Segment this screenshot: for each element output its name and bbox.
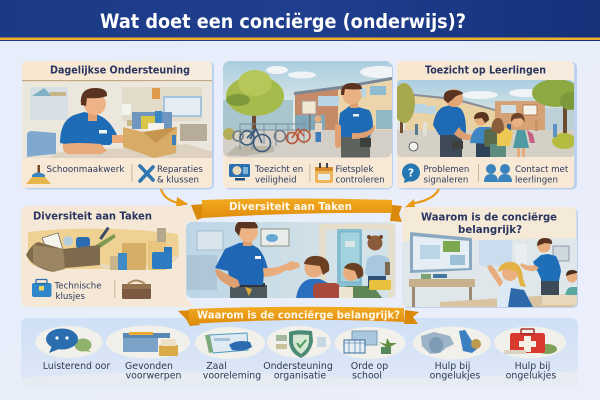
heading: Diversiteit aan Taken: Diversiteit aan Taken [33, 210, 152, 222]
icon: lost and found boxes [123, 332, 178, 356]
smart board [410, 232, 472, 273]
panel: bottom row [21, 318, 578, 386]
item: Hulp bij ongelukjes (first-aid kit) [494, 326, 566, 382]
icon: question bubble: ? [408, 166, 414, 180]
label [203, 361, 261, 382]
arrow: right panel to ribbon [409, 189, 439, 204]
panel: central illustration [186, 220, 396, 299]
tree [226, 70, 284, 130]
item: Orde op school [334, 327, 406, 382]
label: school [352, 370, 382, 382]
header banner [0, 0, 600, 41]
label: Ondersteuning [263, 361, 333, 372]
ribbon text: Diversiteit aan Taken [229, 201, 352, 213]
ribbon text: Waarom is de conciërge belangrijk? [197, 310, 400, 322]
heading: Waarom is de conciërge belangrijk?: Waarom is de conciërge [421, 212, 557, 224]
item: Zaal vooreleming [195, 327, 265, 382]
desk [409, 274, 578, 307]
label: Fietsplek controleren: controleren [336, 176, 385, 186]
child in the yard [314, 116, 322, 142]
fence [240, 124, 306, 150]
icon: speech bubbles [46, 328, 92, 353]
item: Luisterend oor [36, 326, 110, 372]
bear figure [365, 235, 390, 288]
icon: broom [26, 165, 51, 184]
label: Reparaties & klussen: Reparaties [157, 165, 203, 175]
label: Technische klusjes: klusjes [56, 292, 85, 302]
label: Problemen signaleren [424, 165, 469, 186]
label: Gevonden [125, 361, 173, 372]
person: caretaker from behind [433, 89, 474, 158]
label: Reparaties & klussen [157, 165, 203, 186]
football [409, 142, 418, 151]
label [263, 361, 333, 382]
tree left [397, 83, 415, 133]
item: Hulp bij ongelukjes (torch and bottle) [413, 326, 491, 382]
item: Ondersteuning organisatie [263, 326, 333, 382]
label: Fietsplek controleren: Fietsplek [336, 165, 373, 175]
label: Toezicht en veiligheid: Toezicht en [254, 165, 303, 175]
distant children [415, 120, 557, 137]
label: Schoonmaakwerk: Schoonmaakwerk [46, 165, 125, 175]
label: Reparaties & klussen: & klussen [157, 176, 199, 186]
yellow case [369, 280, 391, 290]
label: Problemen signaleren: signaleren [424, 176, 468, 186]
icon: calendar [315, 163, 333, 183]
label: ongelukjes [506, 370, 556, 382]
illustration: caretaker with pupils [393, 79, 580, 158]
girl raising hand [487, 262, 533, 307]
illustration: bike shed and caretaker [223, 61, 400, 158]
panel: Dagelijkse Ondersteuning [22, 61, 214, 190]
heading: Dagelijkse Ondersteuning: Dagelijkse Ondersteuning [50, 64, 190, 76]
person: caretaker writing [60, 88, 124, 154]
panel: Toezicht op Leerlingen [393, 61, 580, 190]
heading: Waarom is de conciërge belangrijk?: belangrijk? [458, 224, 522, 236]
item: Gevonden voorwerpen [106, 326, 190, 382]
ribbon: Waarom is de conciërge belangrijk? [178, 307, 419, 326]
person: teacher [520, 238, 561, 295]
illustration: conciërge at desk with box [22, 81, 212, 158]
icon: shield on screen [276, 330, 326, 358]
label [506, 361, 556, 382]
icon: first aid kit [504, 329, 557, 354]
label [430, 361, 480, 382]
box of supplies [123, 111, 177, 158]
label: Hulp bij [435, 361, 470, 372]
panel: Waarom is de conciërge belangrijk [402, 207, 578, 308]
person: caretaker gesturing [215, 220, 300, 299]
arrow: left panel to ribbon [161, 189, 187, 204]
icon: paper and whistle [205, 333, 252, 353]
pupils with backpacks [296, 256, 383, 299]
label: voorwerpen [126, 370, 181, 382]
illustration: classroom [402, 232, 578, 307]
label: Contact met leerlingen [515, 165, 569, 186]
label: Fietsplek controleren [336, 165, 385, 186]
label: Toezicht en veiligheid: veiligheid [255, 176, 297, 186]
label: Technische klusjes: Technische [54, 282, 102, 292]
icon: tool box [122, 280, 151, 299]
label: Contact met leerlingen: Contact met [515, 165, 569, 175]
title: Wat doet een conciërge (onderwijs)? [100, 10, 466, 33]
panel: Diversiteit aan Taken [21, 206, 198, 307]
label [351, 361, 388, 382]
label: Luisterend oor [43, 361, 110, 372]
person: caretaker standing [335, 83, 375, 158]
icon: flashlight and bottle [421, 330, 481, 354]
door [337, 229, 362, 287]
icon: security monitor [229, 164, 250, 180]
icon: question bubble [402, 164, 420, 183]
boy at right [565, 270, 577, 295]
pupils [470, 112, 535, 158]
label: Hulp bij [515, 361, 550, 372]
label: organisatie [274, 370, 326, 382]
panel: school yard with bikes [223, 61, 400, 190]
icon: wrench and screwdriver [140, 166, 153, 181]
basketball hoop [302, 101, 316, 132]
heading: Waarom is de conciërge belangrijk? [421, 212, 557, 236]
label: Orde op [351, 361, 388, 372]
icon: two people [484, 164, 512, 182]
label: Toezicht en veiligheid [254, 165, 303, 186]
label: Problemen signaleren: Problemen [424, 165, 469, 175]
bicycles [233, 129, 310, 152]
label: Contact met leerlingen: leerlingen [515, 176, 558, 186]
label: Technische klusjes [54, 282, 102, 302]
label: ongelukjes [430, 370, 480, 382]
label: vooreleming [203, 370, 261, 382]
label: Zaal [206, 361, 227, 372]
icon: calendar and plant [344, 331, 397, 354]
illustration: tool belt and boxes [26, 227, 179, 272]
icon: first-aid style blue case [32, 280, 52, 297]
tree right [532, 80, 574, 134]
label [125, 361, 181, 382]
ribbon: Diversiteit aan Taken [191, 198, 402, 222]
heading: Toezicht op Leerlingen: Toezicht op Leerlingen [425, 64, 546, 76]
keys [245, 287, 252, 296]
